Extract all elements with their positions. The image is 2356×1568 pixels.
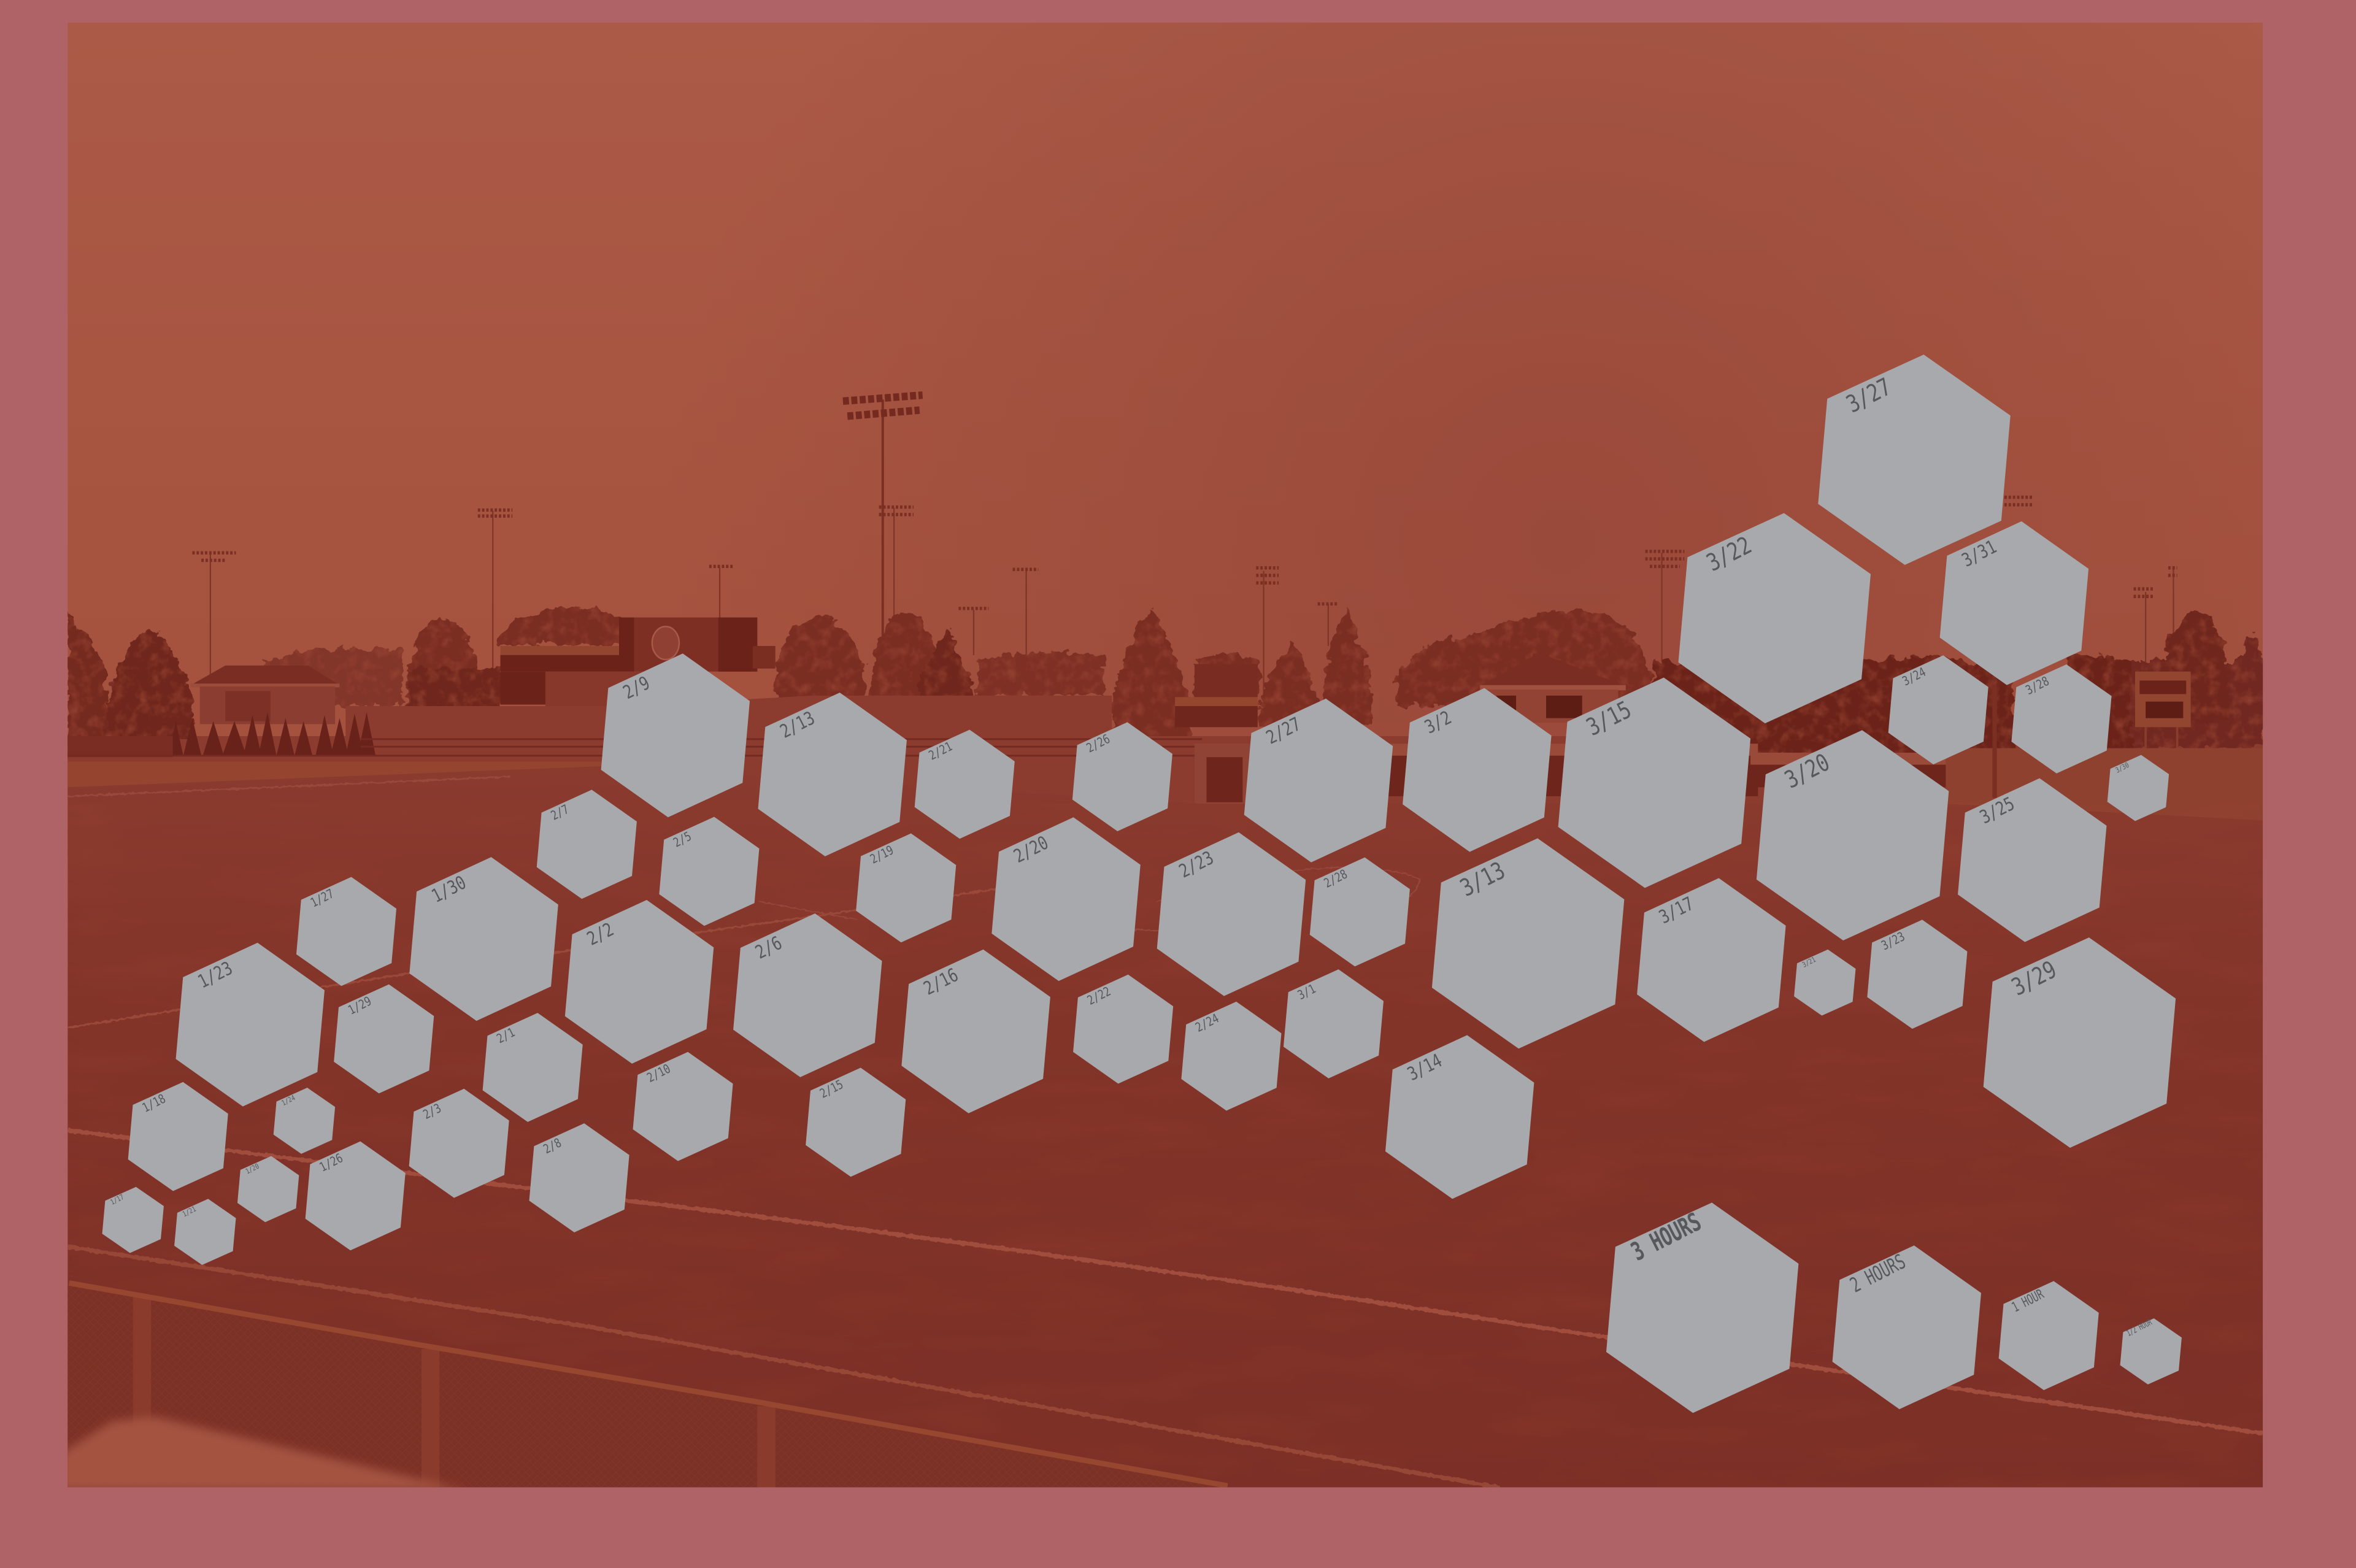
legend 2 hours (1833, 1245, 1981, 1409)
1/21 half hour (174, 1199, 236, 1265)
2/6 two hours: 2/6 (752, 932, 785, 964)
1/26 one hour: 1/26 (317, 1151, 345, 1175)
3/1 one hour: 3/1 (1296, 982, 1318, 1003)
1/27 one hour: 1/27 (309, 887, 336, 910)
1/20 half hour: 1/20 (244, 1162, 261, 1176)
2/21 one hour: 2/21 (926, 740, 955, 763)
1/30 two hours (409, 857, 558, 1021)
1/20 half hour (237, 1156, 299, 1222)
2/13 two hours (758, 693, 907, 856)
3/14 two hours: 3/14 (1404, 1050, 1446, 1085)
3/2 two hours: 3/2 (1422, 707, 1455, 738)
3/25 two hours (1958, 778, 2106, 942)
blurred foreground (60, 1416, 466, 1490)
grass mottling (67, 804, 2263, 1487)
3/22 three hours: 3/22 (1703, 531, 1756, 577)
1/26 one hour (306, 1141, 406, 1250)
2/28 one hour (1310, 858, 1410, 966)
2/3 one hour (409, 1089, 509, 1198)
2/19 one hour: 2/19 (868, 844, 896, 867)
dugout and long sideline shelter (1195, 744, 1946, 804)
grass field (67, 766, 2263, 1487)
2/19 one hour (856, 833, 956, 942)
chain link fence (67, 1283, 1228, 1487)
3/17 two hours: 3/17 (1656, 893, 1697, 928)
right side fencing (1946, 748, 2263, 820)
3/15 three hours (1558, 677, 1750, 888)
2/10 one hour: 2/10 (645, 1062, 673, 1085)
3/20 three hours (1757, 730, 1949, 940)
2/27 two hours (1244, 699, 1393, 863)
2/21 one hour (915, 729, 1015, 839)
2/26 one hour (1072, 722, 1172, 831)
3/21 half hour: 3/21 (1801, 955, 1817, 969)
2/6 two hours (733, 913, 882, 1077)
2/7 one hour: 2/7 (549, 802, 571, 823)
1/18 one hour: 1/18 (140, 1092, 168, 1115)
3/25 two hours: 3/25 (1977, 793, 2018, 828)
1/30 two hours: 1/30 (428, 872, 469, 907)
3/28 one hour (2011, 664, 2112, 774)
3/20 three hours: 3/20 (1780, 748, 1834, 794)
2/13 two hours: 2/13 (777, 708, 818, 743)
2/16 two hours: 2/16 (920, 964, 962, 999)
3/30 half hour: 3/30 (2114, 761, 2130, 775)
2/20 two hours (991, 817, 1141, 981)
2/27 two hours: 2/27 (1263, 713, 1304, 748)
1/18 one hour (128, 1082, 228, 1191)
2/7 one hour (537, 790, 637, 899)
2/22 one hour: 2/22 (1085, 985, 1113, 1008)
scoreboard (2135, 672, 2191, 748)
2/5 one hour: 2/5 (671, 829, 694, 850)
left pavilion with shrubs (168, 666, 375, 756)
1/27 one hour (296, 877, 396, 986)
3/17 two hours (1637, 878, 1786, 1042)
2/2 two hours: 2/2 (584, 919, 617, 950)
far right low building (1175, 664, 1258, 727)
3/24 one hour: 3/24 (1900, 665, 1928, 689)
3/27 three hours: 3/27 (1842, 373, 1896, 418)
walkway (67, 762, 631, 787)
3/29 three hours (1984, 937, 2176, 1148)
2/2 two hours (565, 900, 714, 1064)
3/23 one hour: 3/23 (1879, 929, 1908, 953)
1/24 half hour: 1/24 (280, 1093, 296, 1107)
2/15 one hour: 2/15 (818, 1078, 845, 1101)
2/28 one hour: 2/28 (1322, 867, 1350, 891)
1/23 two hours (176, 943, 325, 1107)
legend half hour (2120, 1316, 2182, 1385)
3/31 two hours: 3/31 (1958, 536, 2000, 571)
2/15 one hour (806, 1067, 906, 1177)
3/14 two hours (1385, 1035, 1534, 1199)
2/16 two hours (901, 950, 1050, 1113)
legend 2 hours: 2 HOURS (1846, 1250, 1909, 1297)
3/28 one hour: 3/28 (2023, 674, 2052, 698)
1/29 one hour (334, 985, 434, 1093)
tree line (67, 605, 2269, 759)
2/24 one hour (1181, 1002, 1281, 1111)
sky (67, 23, 2263, 744)
3/24 one hour (1888, 655, 1988, 764)
light poles (192, 395, 2177, 721)
legend: hexagon size scale (1606, 1202, 2182, 1413)
3/23 one hour (1867, 920, 1967, 1029)
2/9 two hours (601, 653, 750, 817)
2/23 two hours: 2/23 (1176, 847, 1217, 882)
3/15 three hours: 3/15 (1582, 696, 1636, 742)
legend 1 hour: 1 HOUR (2009, 1286, 2047, 1315)
3/21 half hour (1794, 950, 1855, 1016)
2/9 two hours: 2/9 (620, 673, 653, 704)
3/13 three hours (1432, 839, 1624, 1048)
3/2 two hours (1403, 688, 1552, 852)
3/31 two hours (1940, 521, 2088, 685)
field lines (67, 777, 2262, 1487)
left low tree mass under pavilion (67, 736, 173, 757)
1/17 half hour (102, 1187, 164, 1253)
3/29 three hours: 3/29 (2008, 956, 2061, 1002)
hexagon chart: daily hours by date (102, 355, 2176, 1265)
cupola building (1480, 653, 1626, 723)
3/13 three hours: 3/13 (1456, 856, 1510, 902)
legend 1 hour (1999, 1281, 2099, 1390)
1/23 two hours: 1/23 (194, 958, 236, 993)
legend 3 hours: 3 HOURS (1626, 1207, 1706, 1267)
legend 3 hours (1606, 1202, 1798, 1413)
1/29 one hour: 1/29 (346, 994, 374, 1018)
ground base under the horizon (67, 736, 2263, 856)
3/30 half hour (2108, 755, 2169, 821)
3/27 three hours (1818, 355, 2011, 565)
2/8 one hour (529, 1123, 629, 1232)
2/24 one hour: 2/24 (1193, 1012, 1222, 1035)
1/24 half hour (274, 1088, 335, 1154)
stadium building (501, 618, 776, 706)
2/23 two hours (1157, 832, 1306, 996)
2/10 one hour (633, 1052, 733, 1161)
2/1 one hour (483, 1013, 583, 1122)
2/8 one hour: 2/8 (541, 1136, 564, 1157)
2/26 one hour: 2/26 (1084, 732, 1112, 756)
3/22 three hours (1679, 513, 1871, 723)
legend half hour: 1/2 HOUR (2125, 1316, 2154, 1339)
perimeter fence (67, 739, 1202, 756)
3/1 one hour (1284, 969, 1384, 1078)
1/21 half hour: 1/21 (181, 1204, 198, 1219)
2/1 one hour: 2/1 (495, 1026, 517, 1047)
2/3 one hour: 2/3 (421, 1101, 444, 1122)
2/22 one hour (1073, 975, 1173, 1083)
1/17 half hour: 1/17 (109, 1193, 125, 1207)
2/5 one hour (659, 817, 759, 926)
distant ground hill (67, 696, 1191, 788)
2/20 two hours: 2/20 (1011, 832, 1052, 867)
